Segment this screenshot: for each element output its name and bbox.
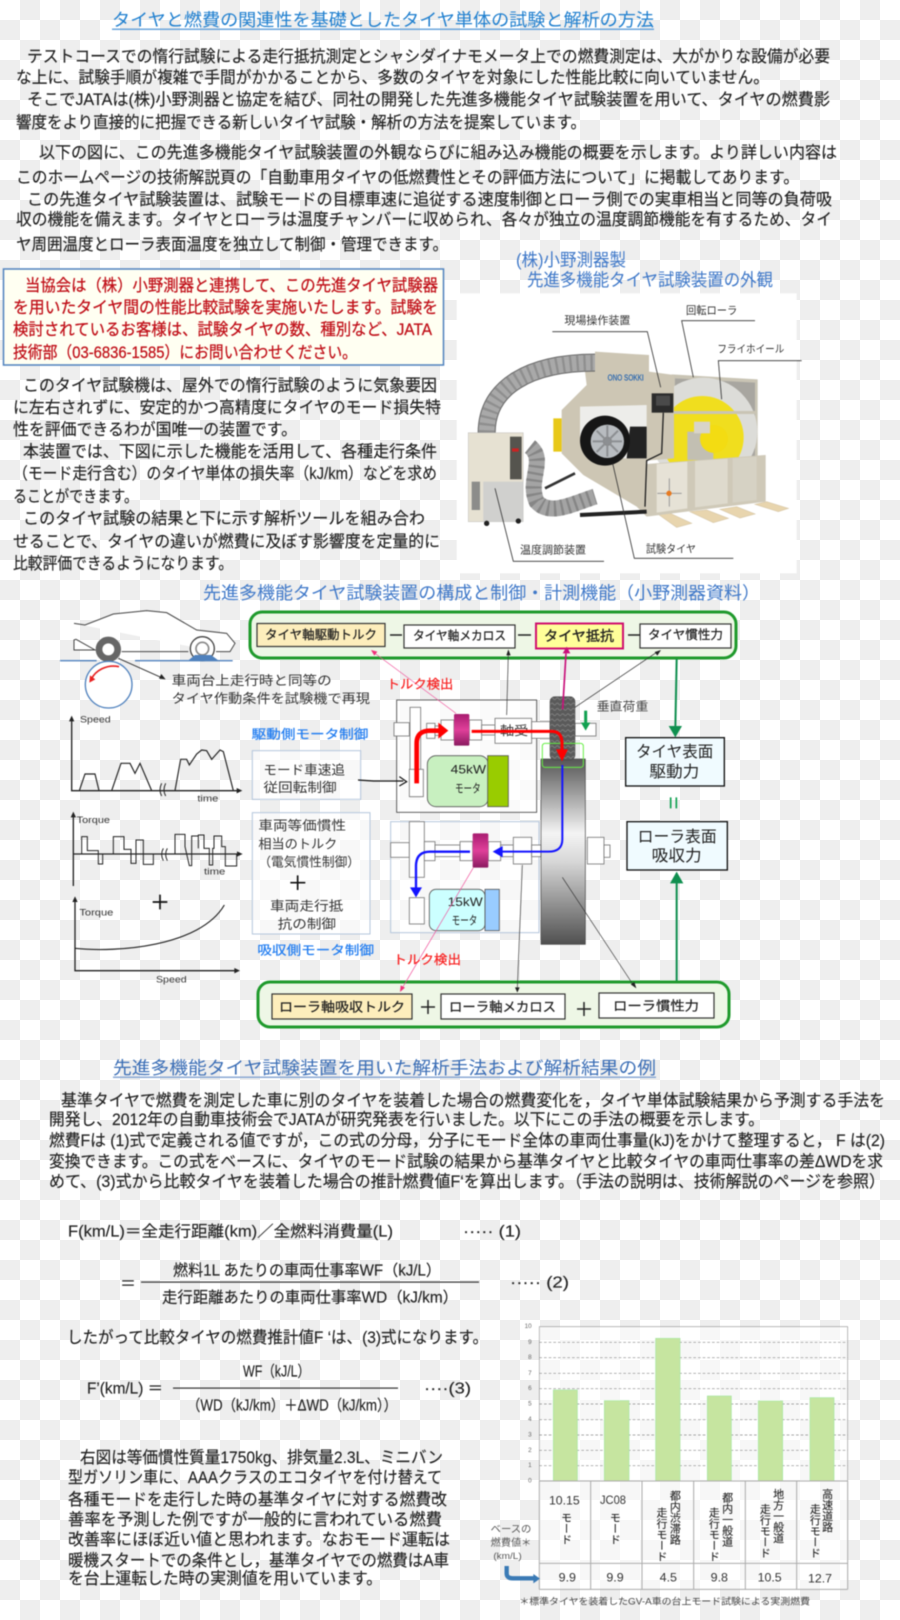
callout lines: [495, 321, 802, 561]
torque detect connectors: [371, 650, 473, 992]
mode labels: 走行モード: [758, 1503, 771, 1558]
text: test condition note: [172, 673, 370, 706]
equipment description text block: この先進タイヤ試験装置は、試験モードの目標車速に追従する速度制御とローラ側での実車相当と同等の負荷吸: [27, 190, 832, 209]
base fuel economy values: 10.5: [758, 1570, 782, 1584]
intro text block: [16, 47, 830, 132]
icon: car on roller: [60, 611, 235, 708]
main housing: [562, 352, 674, 517]
absorption side unit: モータ: [452, 914, 477, 928]
chart: torque vs speed: Speed: [156, 974, 187, 984]
arrow: drive power flow: [417, 723, 568, 783]
left diagrams: vehicle and control curves: [60, 611, 374, 984]
label: bearing: 軸受: [500, 724, 528, 738]
chart: speed vs time: Speed: [80, 714, 111, 724]
chart explanation text block: 型ガソリン車に、AAAクラスのエコタイヤを付け替えて: [68, 1468, 442, 1487]
equation 3: ····(3): [424, 1380, 471, 1398]
drive side unit: モータ: [455, 781, 481, 795]
panel: inertia and resistance control: （電気慣性制御）: [258, 854, 360, 869]
equation 1: ····· (1): [463, 1224, 521, 1240]
mode labels: 都内一般道: [721, 1491, 733, 1547]
drive side unit: [394, 700, 550, 812]
chart: torque vs time: Torque: [77, 815, 110, 825]
heading: equipment appearance: 先進多機能タイヤ試験装置の外観: [527, 270, 773, 290]
drive side unit: 45kW: [451, 763, 486, 776]
intro text block: そこでJATAは(株)小野測器と協定を結び、同社の開発した先進多機能タイヤ試験装置を用いて、タイヤの燃費影: [27, 90, 830, 109]
box: tire resistance: タイヤ抵抗: [544, 628, 614, 644]
mode labels: JC08: [600, 1493, 626, 1507]
equation 3: （WD（kJ/km）＋ΔWD（kJ/km））: [187, 1398, 397, 1414]
text: test condition note: タイヤ作動条件を試験機で再現: [172, 691, 370, 706]
mode labels: 高速道路: [821, 1487, 833, 1533]
box: roller shaft absorption torque: [272, 994, 412, 1019]
bars: [553, 1338, 834, 1481]
absorption side unit: 15kW: [448, 896, 483, 909]
mode labels: 走行モード: [707, 1506, 720, 1562]
roller: [541, 759, 610, 944]
y axis labels: 1: [528, 1462, 532, 1469]
label: base fuel economy: ベースの: [491, 1523, 531, 1535]
panel: speed tracking control: [252, 751, 361, 799]
y axis labels: 7: [528, 1370, 532, 1377]
label texts: 回転ローラ: [686, 305, 737, 317]
chart: torque vs time: time: [204, 867, 225, 877]
label: torque detect lower: トルク検出: [393, 953, 461, 967]
base fuel economy values: 9.9: [606, 1571, 624, 1585]
left text block: に左右されずに、安定的かつ高精度にタイヤのモード損失特: [13, 398, 441, 417]
diagram: test machine structure: [358, 647, 727, 993]
mode labels: 走行モード: [808, 1503, 821, 1558]
analysis description text block: 基準タイヤで燃費を測定した車に別のタイヤを装着した場合の燃費変化を，タイヤ単体試験結果から予測する手法を: [61, 1091, 885, 1110]
panel: speed tracking control: 従回転制御: [263, 780, 337, 795]
callout: contact notice: を用いたタイヤ間の性能比較試験を実施いたします。試験を: [13, 298, 438, 317]
plot grid: [539, 1327, 848, 1481]
arrow: to values: [507, 1566, 540, 1583]
base fuel economy values: 12.7: [808, 1572, 832, 1586]
left text block: 比較評価できるようになります。: [13, 554, 233, 573]
chart: fuel economy improvement by mode: [491, 1323, 848, 1607]
left text block: このタイヤ試験の結果と下に示す解析ツールを組み合わ: [23, 509, 425, 528]
callout: contact notice: [4, 269, 444, 365]
chart explanation text block: 暖機スタートでの条件とし，基準タイヤでの燃費はA車: [68, 1551, 449, 1570]
equation 3: WF（kJ/L）: [243, 1364, 310, 1380]
analysis description text block: 燃費Fは (1)式で定義される値ですが，この式の分母，分子にモード全体の車両仕事量(kJ)をかけて整理すると， F は(2): [49, 1131, 885, 1150]
box: roller surface absorption force: ローラ表面: [638, 828, 717, 846]
mode labels: 走行モード: [655, 1506, 667, 1562]
photo: tire test machine: ONO SOKKI: [608, 373, 644, 382]
equation 1: F(km/L)＝全走行距離(km)／全燃料消費量(L): [68, 1222, 393, 1240]
lower duct: [530, 447, 647, 515]
equation 2: 燃料1L あたりの車両仕事率WF（kJ/L）: [173, 1262, 441, 1280]
y axis labels: 8: [528, 1354, 532, 1361]
equation 3: F’(km/L) ＝: [87, 1380, 163, 1398]
mode labels: モード: [560, 1512, 572, 1545]
box: roller inertia force: [599, 993, 714, 1018]
chart explanation text block: 各種モードを走行した時の基準タイヤに対する燃費改: [68, 1490, 447, 1509]
intro text block: な上に、試験手順が複雑で手間がかかることから、多数のタイヤを対象にした性能比較に向いていません。: [16, 68, 769, 87]
equation 2: ····· (2): [510, 1274, 569, 1292]
analysis description text block: めて、(3)式から比較タイヤを装着した場合の推計燃費値F‘を算出します。（手法の説明は、技術解説のページを参照）: [49, 1172, 885, 1191]
control display: [645, 393, 673, 507]
chart: speed vs time: time: [197, 793, 218, 803]
box: roller surface absorption force: [627, 822, 727, 870]
box: tire shaft mechanical loss: タイヤ軸メカロス: [413, 629, 506, 643]
intro text block: 響度をより直接的に把握できる新しいタイヤ試験・解析の方法を提案しています。: [16, 113, 586, 132]
machine base: [647, 455, 766, 517]
base fuel economy values: 9.9: [559, 1571, 576, 1585]
y axis labels: 2: [528, 1447, 532, 1454]
upper duct: [487, 363, 595, 433]
left text block: 本装置では、下図に示した機能を活用して、各種走行条件: [23, 442, 437, 461]
arrow: tire to resistance: [563, 647, 570, 709]
title: タイヤと燃費の関連性を基礎としたタイヤ単体の試験と解析の方法: [112, 10, 654, 30]
chart: torque vs speed: [72, 896, 240, 984]
connector arrowheads: [506, 649, 661, 993]
box: tire surface driving force: タイヤ表面: [636, 743, 713, 761]
label: base fuel economy: [491, 1523, 531, 1561]
y axis labels: 6: [528, 1385, 532, 1392]
arrow: absorption power flow: [410, 765, 562, 897]
y axis labels: [525, 1323, 532, 1484]
equation 2: 走行距離あたりの車両仕事率WD（kJ/km）: [162, 1288, 458, 1306]
panel: inertia and resistance control: 相当のトルク: [258, 836, 337, 851]
y axis labels: 9: [528, 1339, 532, 1346]
equipment description text block: このホームページの技術解説頁の「自動車用タイヤの低燃費性とその評価方法について」に掲載してあります。: [16, 168, 799, 187]
text: test condition note: 車両台上走行時と同等の: [172, 673, 332, 688]
panel: inertia and resistance control: [252, 813, 370, 934]
label texts: 試験タイヤ: [646, 542, 696, 555]
equipment description text block: 以下の図に、この先進多機能タイヤ試験装置の外観ならびに組み込み機能の概要を示します。より詳しい内容は: [39, 143, 837, 162]
box: roller inertia force: ローラ慣性力: [613, 998, 699, 1014]
tire: [580, 416, 630, 466]
y axis labels: 4: [528, 1416, 532, 1423]
analysis description text block: 変換できます。この式をベースに、タイヤのモード試験の結果から基準タイヤと比較タイヤの車両仕事率の差ΔWDを求: [49, 1152, 883, 1171]
panel: inertia and resistance control: 抗の制御: [278, 916, 336, 931]
chart explanation text block: 善率を予測した例ですが一般的に言われている燃費: [68, 1510, 442, 1529]
label texts: [520, 305, 785, 557]
arrow: green down: [669, 659, 682, 737]
label: base fuel economy: (km/L): [493, 1551, 522, 1561]
thin connector arrows: [507, 652, 657, 988]
left text block: [13, 376, 441, 573]
panel: inertia and resistance control: 車両等価慣性: [258, 818, 346, 833]
label texts: フライホイール: [717, 343, 785, 355]
arrow: control signal: [358, 777, 407, 786]
absorption side unit: [391, 822, 541, 933]
photo: tire test machine: [457, 293, 802, 573]
wooden skids: [656, 502, 788, 527]
box: roller shaft mechanical loss: [441, 994, 565, 1019]
label texts: 温度調節装置: [520, 544, 586, 557]
temperature control unit: [468, 433, 523, 526]
equation 2: ＝: [120, 1274, 136, 1294]
mode labels: 地方一般道: [772, 1488, 784, 1543]
label: torque detect upper: トルク検出: [387, 677, 453, 691]
heading: equipment appearance: [516, 250, 773, 290]
footnote: ＊標準タイヤを装着したGV-A車の台上モード試験による実測燃費: [519, 1596, 810, 1607]
box: tire resistance: [536, 624, 623, 648]
chart explanation text block: 右図は等価慣性質量1750kg、排気量2.3L、ミニバン: [80, 1448, 443, 1467]
mode labels: モード: [608, 1512, 620, 1545]
chart: torque vs time: [71, 812, 243, 886]
callout: contact notice: 当協会は（株）小野測器と連携して、この先進タイヤ試験器: [25, 276, 438, 295]
mode labels: [549, 1487, 833, 1562]
left text block: ることができます。: [13, 487, 138, 506]
mode labels: 都内渋滞路: [668, 1490, 681, 1546]
box: roller surface absorption force: 吸収力: [652, 847, 702, 865]
tire and load axle: [542, 697, 596, 767]
panel: tire side forces: [250, 612, 736, 658]
box: roller shaft mechanical loss: ローラ軸メカロス: [449, 1000, 556, 1014]
left text block: （モード走行含む）のタイヤ単体の損失率（kJ/km）などを求め: [13, 464, 437, 483]
equipment description text block: [16, 143, 837, 254]
text: lead-in to equation 3: したがって比較タイヤの燃費推計値F ‘は、(3)式になります。: [67, 1328, 488, 1347]
base fuel economy values: [559, 1570, 832, 1586]
equation 1: [68, 1222, 521, 1240]
heading: analysis method: 先進多機能タイヤ試験装置を用いた解析手法および解析結果の例: [113, 1058, 656, 1078]
equation 3: [87, 1364, 471, 1414]
callout: contact notice: 検討されているお客様は、試験タイヤの数、種別など、JATA: [13, 320, 432, 339]
equipment description text block: 収の機能を備えます。タイヤとローラは温度チャンバーに収められ、各々が独立の温度調節機能を有するため、タイ: [16, 210, 832, 229]
box: roller shaft absorption torque: ローラ軸吸収トルク: [279, 1000, 405, 1014]
mode labels: 10.15: [549, 1494, 580, 1508]
label: drive side motor control: 駆動側モータ制御: [252, 728, 368, 742]
y axis labels: 5: [528, 1400, 532, 1407]
label: vertical load: 垂直荷重: [597, 699, 648, 714]
left text block: せることで、タイヤの違いが燃費に及ぼす影響度を定量的に: [13, 532, 440, 551]
panel: inertia and resistance control: 車両走行抵: [270, 898, 343, 913]
label texts: 現場操作装置: [564, 314, 631, 327]
label: absorption side motor control: 吸収側モータ制御: [257, 944, 374, 958]
equals sign: [671, 797, 676, 808]
flywheel frame: [649, 374, 758, 486]
chart: speed vs time: [69, 714, 242, 803]
box: tire shaft drive torque: [257, 624, 385, 646]
equation 2: [120, 1262, 569, 1306]
left text block: このタイヤ試験機は、屋外での惰行試験のように気象要因: [23, 376, 437, 395]
base fuel economy values: 4.5: [660, 1571, 677, 1585]
box: tire inertia force: タイヤ慣性力: [648, 627, 723, 642]
box: tire surface driving force: 駆動力: [649, 763, 699, 781]
left text block: 性を評価できるわが国唯一の装置です。: [13, 420, 297, 439]
intro text block: テストコースでの惰行試験による走行抵抗測定とシャシダイナモメータ上での燃費測定は、大がかりな設備が必要: [27, 47, 830, 66]
y axis labels: 10: [525, 1323, 532, 1330]
chart explanation text block: [68, 1448, 450, 1588]
box: tire surface driving force: [626, 738, 724, 786]
chart explanation text block: を台上運転した時の実測値を用いています。: [68, 1569, 382, 1588]
chart explanation text block: 改善率にほぼ近い値と思われます。なおモード運転は: [68, 1530, 450, 1549]
callout: contact notice: 技術部（03-6836-1585）にお問い合わせください。: [13, 343, 357, 362]
base fuel economy values: 9.8: [711, 1571, 728, 1585]
plus sign: [153, 895, 167, 909]
y axis labels: 0: [528, 1477, 532, 1484]
panel: speed tracking control: モード車速追: [263, 762, 345, 777]
heading: equipment appearance: (株)小野測器製: [516, 250, 626, 270]
box: tire shaft mechanical loss: [404, 625, 515, 648]
heading: structure and control: 先進多機能タイヤ試験装置の構成と制御・計測機能（小野測器資料）: [203, 583, 760, 603]
box: tire inertia force: [640, 624, 731, 648]
y axis labels: 3: [528, 1431, 532, 1438]
analysis description text block: 開発し、2012年の自動車技術会でJATAが研究発表を行いました。以下にこの手法の概要を示します。: [49, 1110, 764, 1129]
equipment description text block: ヤ周囲温度とローラ表面温度を独立して制御・管理できます。: [16, 235, 448, 254]
panel: roller side forces: [258, 982, 729, 1027]
chart: torque vs speed: Torque: [79, 908, 113, 918]
table: [539, 1481, 848, 1589]
label: base fuel economy: 燃費値＊: [491, 1536, 531, 1549]
analysis description text block: [49, 1091, 885, 1191]
box: tire shaft drive torque: タイヤ軸駆動トルク: [265, 628, 377, 642]
arrow: green up: [670, 872, 683, 981]
